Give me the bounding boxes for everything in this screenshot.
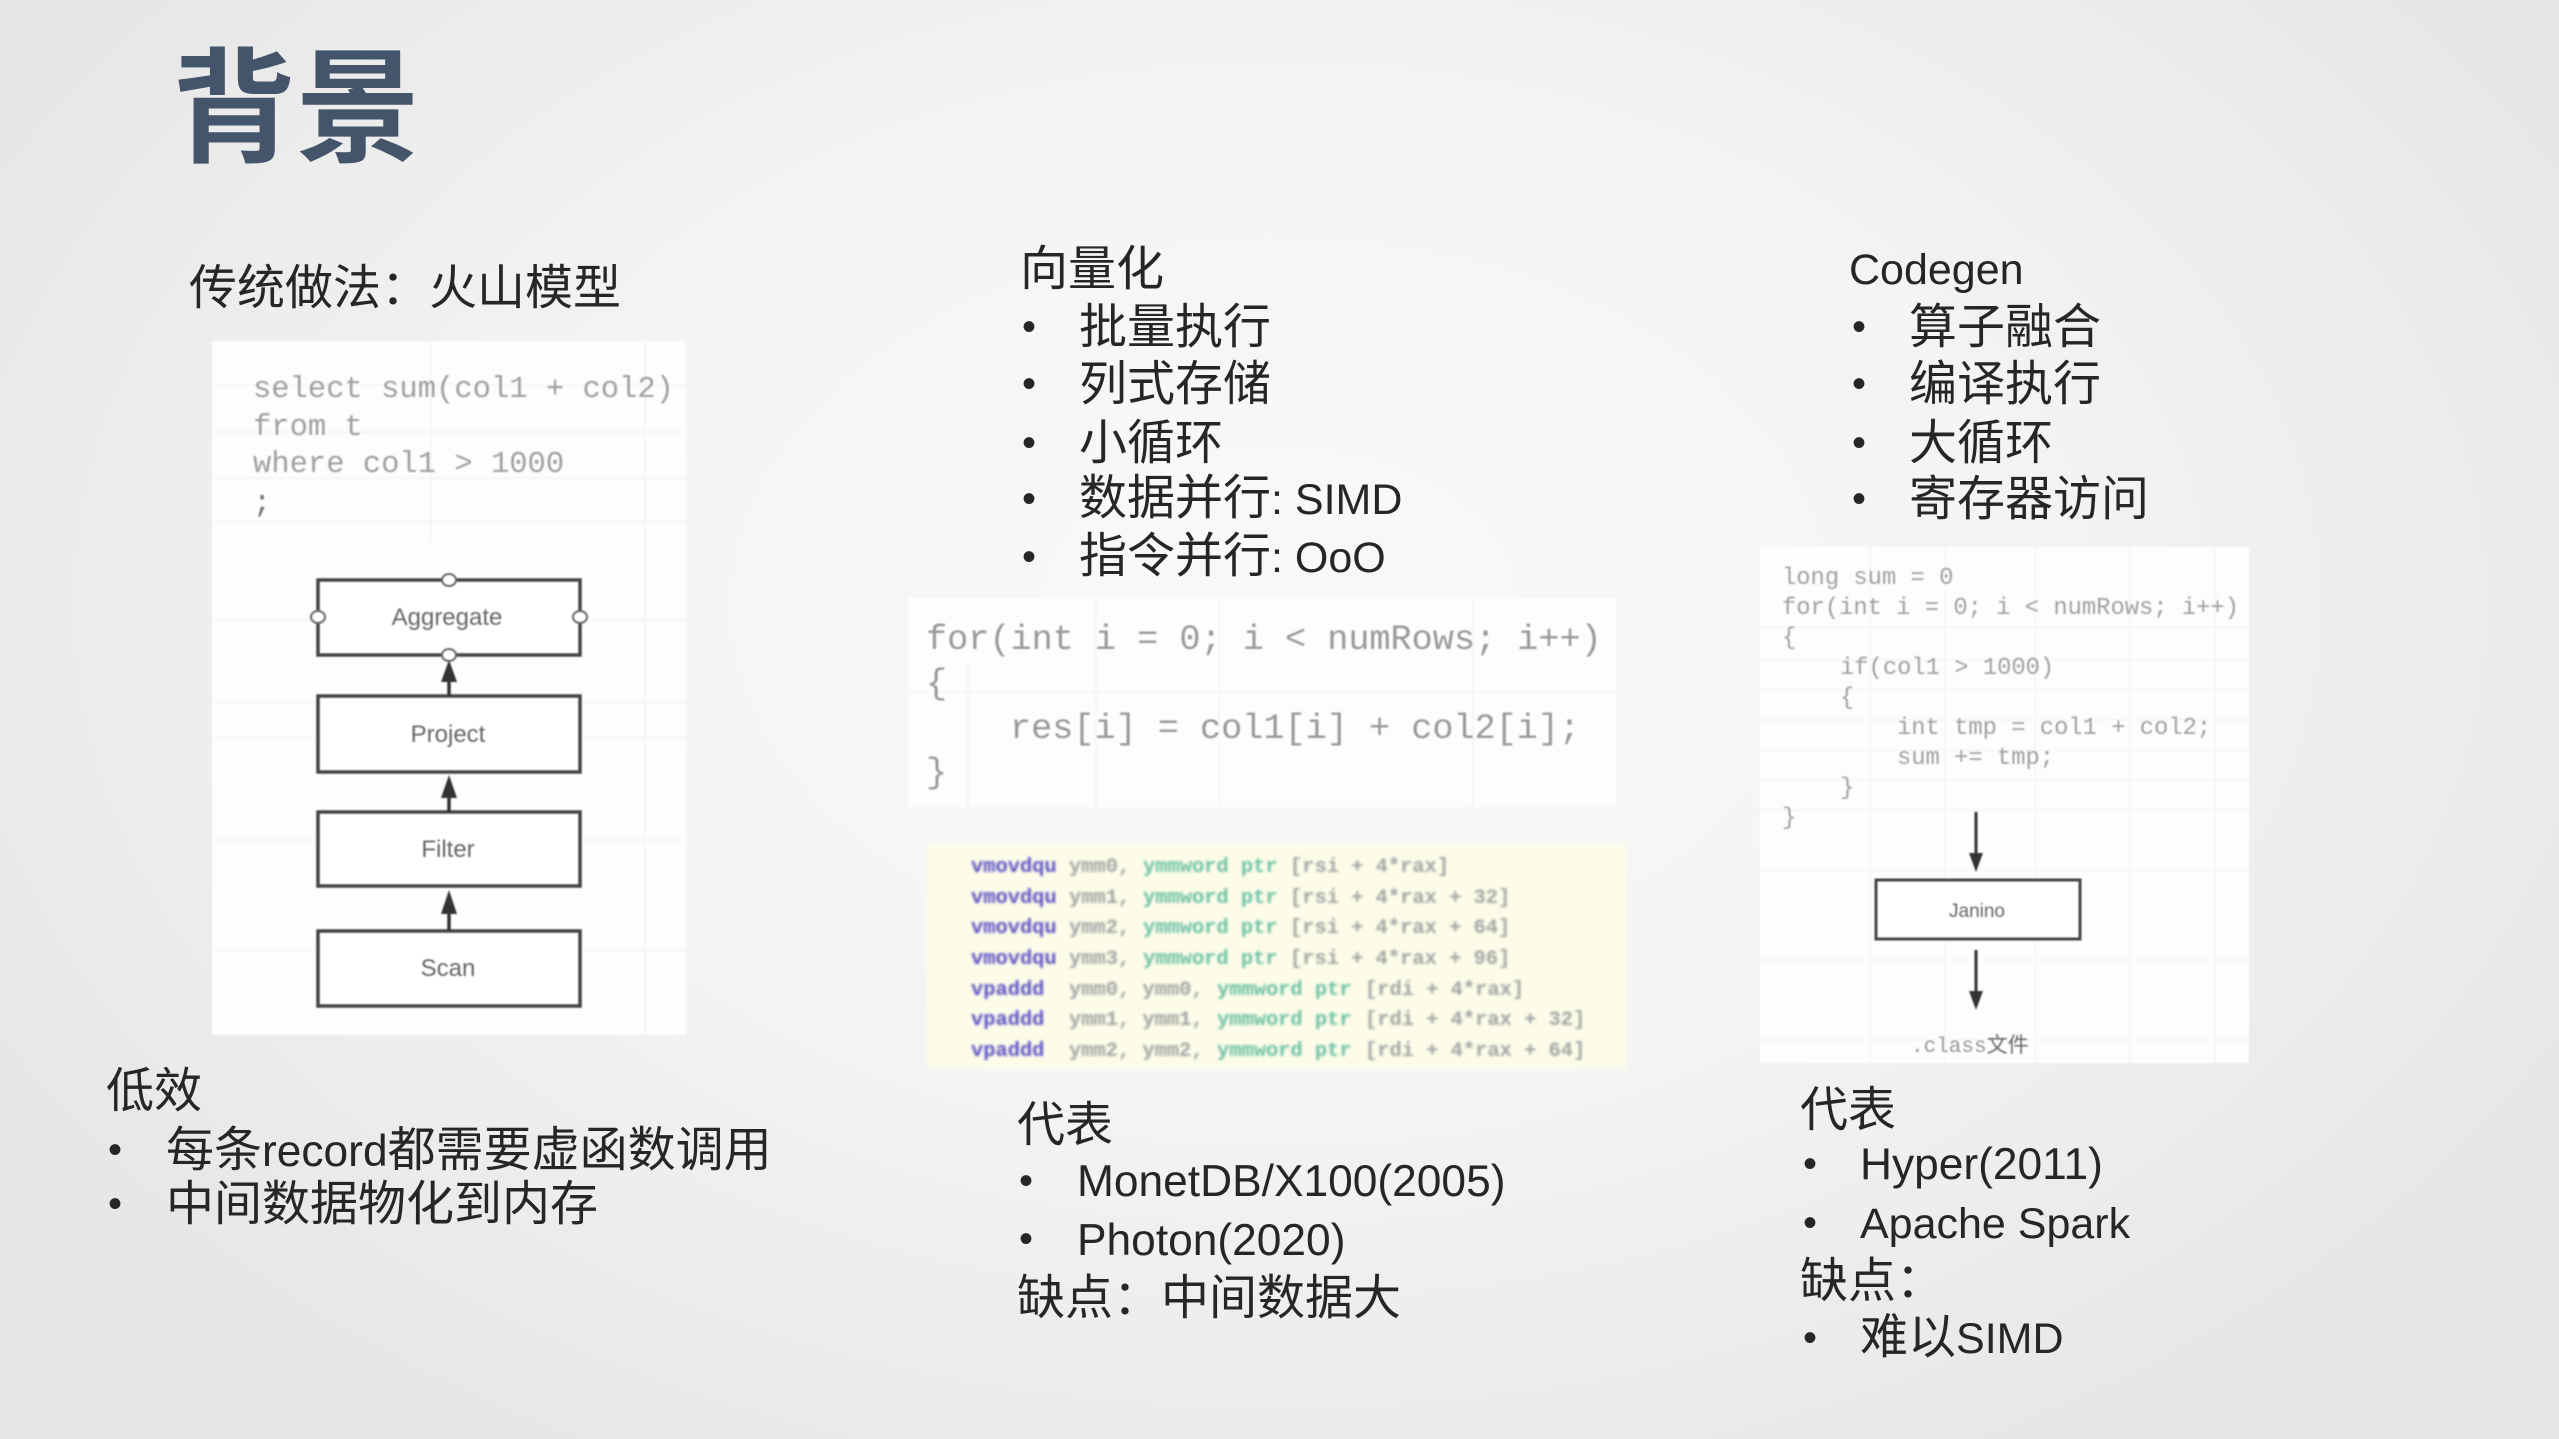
- text block: inefficiency: 每条record都需要虚函数调用: [166, 1124, 772, 1177]
- sql code: where col1 > 1000: [253, 448, 564, 482]
- text block: vectorization representatives and drawback: 缺点：中间数据大: [1017, 1258, 1401, 1328]
- panel: simd assembly code: ymmword ptr: [1217, 1040, 1352, 1063]
- panel: simd assembly code: ymmword ptr: [1143, 948, 1278, 971]
- panel: simd assembly code: [rsi + 4*rax + 64]: [1290, 917, 1510, 940]
- text block: codegen: 算子融合: [1909, 301, 2101, 354]
- arrows: [441, 660, 457, 931]
- heading: volcano model: 传统做法：火山模型: [189, 248, 621, 318]
- text block: vectorization representatives and drawback: 代表: [1017, 1099, 1113, 1152]
- panel: simd assembly code: ymm1,: [1069, 887, 1130, 910]
- text block: vectorization: 指令并行: OoO: [1079, 530, 1386, 583]
- generated code: [1782, 565, 2239, 832]
- text block: vectorization representatives and drawback: MonetDB/X100(2005): [1077, 1157, 1505, 1206]
- panel: simd assembly code: ymm3,: [1069, 948, 1130, 971]
- generated code: if(col1 > 1000): [1840, 655, 2054, 682]
- text block: codegen: 寄存器访问: [1909, 473, 2149, 526]
- text block: codegen representatives and drawback: 代表: [1800, 1084, 1896, 1137]
- text block: codegen representatives and drawback: •: [1803, 1316, 1817, 1360]
- panel: simd assembly code: vpaddd: [971, 979, 1044, 1002]
- text block: vectorization: •: [1022, 362, 1036, 406]
- text block: vectorization: 向量化: [1020, 243, 1164, 296]
- janino box: [1876, 880, 2080, 939]
- text block: inefficiency: [106, 1065, 772, 1231]
- panel: vectorized loop code: }: [926, 753, 947, 793]
- panel: simd assembly code: ymm0,: [1069, 856, 1130, 879]
- arrow into janino: [1969, 812, 1983, 872]
- text block: codegen: 大循环: [1909, 417, 2053, 470]
- panel: simd assembly code: [rsi + 4*rax + 96]: [1290, 948, 1510, 971]
- panel: codegen diagram: [1760, 548, 2249, 1063]
- panel: simd assembly code: ymmword ptr: [1143, 856, 1278, 879]
- panel: simd assembly code: vpaddd: [971, 1040, 1044, 1063]
- text block: codegen representatives and drawback: 难以SIMD: [1860, 1311, 2064, 1364]
- text block: codegen: •: [1852, 477, 1866, 521]
- generated code: {: [1840, 685, 1854, 712]
- text block: codegen representatives and drawback: •: [1803, 1201, 1817, 1245]
- text block: vectorization: 小循环: [1079, 417, 1223, 470]
- text block: vectorization representatives and drawback: Photon(2020): [1077, 1216, 1345, 1265]
- box labels: [392, 604, 502, 982]
- panel: simd assembly code: vmovdqu: [971, 948, 1057, 971]
- generated code: {: [1782, 625, 1796, 652]
- box labels: Filter: [421, 836, 475, 863]
- panel: simd assembly code: [rdi + 4*rax + 32]: [1365, 1009, 1585, 1032]
- panel: vectorized loop code: {: [926, 664, 947, 704]
- text block: codegen: •: [1852, 305, 1866, 349]
- panel: simd assembly code: ymm1, ymm1,: [1069, 1009, 1204, 1032]
- sql code: ;: [253, 487, 271, 521]
- text block: codegen representatives and drawback: Hyper(2011): [1860, 1140, 2103, 1189]
- panel: simd assembly code: [928, 844, 1626, 1068]
- title: 背景: [172, 41, 420, 179]
- panel: simd assembly code: ymmword ptr: [1143, 887, 1278, 910]
- text block: vectorization: •: [1022, 477, 1036, 521]
- sql code: [253, 373, 674, 521]
- text block: vectorization: 批量执行: [1079, 301, 1271, 354]
- text block: vectorization representatives and drawback: •: [1019, 1159, 1033, 1203]
- text block: vectorization: •: [1022, 421, 1036, 465]
- panel: simd assembly code: vmovdqu: [971, 856, 1057, 879]
- panel: simd assembly code: ymm2,: [1069, 917, 1130, 940]
- panel: simd assembly code: [rsi + 4*rax]: [1290, 856, 1449, 879]
- panel: simd assembly code: ymm0, ymm0,: [1069, 979, 1204, 1002]
- text block: codegen: •: [1852, 421, 1866, 465]
- panel: simd assembly code: vmovdqu: [971, 887, 1057, 910]
- generated code: sum += tmp;: [1897, 745, 2054, 772]
- text block: codegen: [1849, 246, 2149, 526]
- panel: simd assembly code: vmovdqu: [971, 917, 1057, 940]
- text block: vectorization: 数据并行: SIMD: [1079, 472, 1402, 525]
- connection handles: [311, 574, 587, 661]
- generated code: }: [1840, 775, 1854, 802]
- text block: inefficiency: •: [108, 1128, 122, 1172]
- panel: volcano model diagram: [212, 341, 686, 1035]
- panel: codegen diagram: Janino: [1949, 901, 2005, 922]
- text block: inefficiency: •: [108, 1182, 122, 1226]
- flow boxes: [318, 580, 580, 1006]
- text block: vectorization: •: [1022, 535, 1036, 579]
- text block: codegen representatives and drawback: Apache Spark: [1860, 1200, 2130, 1248]
- arrow out of janino: [1969, 950, 1983, 1010]
- panel: vectorized loop code: for(int i = 0; i < numRows; i++): [926, 620, 1602, 660]
- text block: vectorization representatives and drawback: [1017, 1099, 1505, 1328]
- text block: codegen: Codegen: [1849, 246, 2024, 294]
- panel: simd assembly code: [rsi + 4*rax + 32]: [1290, 887, 1510, 910]
- text block: inefficiency: 中间数据物化到内存: [166, 1178, 598, 1231]
- panel: simd assembly code: ymmword ptr: [1217, 1009, 1352, 1032]
- panel: vectorized loop code: res[i] = col1[i] + col2[i];: [1010, 709, 1580, 749]
- panel: simd assembly code: ymm2, ymm2,: [1069, 1040, 1204, 1063]
- sql code: select sum(col1 + col2): [253, 373, 674, 407]
- text block: vectorization: •: [1022, 305, 1036, 349]
- box labels: Project: [411, 721, 486, 748]
- panel: vectorized loop code: [926, 620, 1602, 793]
- panel: simd assembly code: ymmword ptr: [1217, 979, 1352, 1002]
- generated code: long sum = 0: [1782, 565, 1953, 592]
- text block: inefficiency: 低效: [106, 1065, 202, 1118]
- text block: codegen representatives and drawback: 缺点：: [1800, 1241, 1944, 1311]
- generated code: for(int i = 0; i < numRows; i++): [1782, 595, 2239, 622]
- text block: vectorization: 列式存储: [1079, 358, 1271, 411]
- panel: simd assembly code: vpaddd: [971, 1009, 1044, 1032]
- panel: simd assembly code: [rdi + 4*rax]: [1365, 979, 1524, 1002]
- class file label: .class文件: [1911, 1029, 2029, 1059]
- text block: vectorization: [1020, 243, 1402, 583]
- text block: codegen representatives and drawback: [1800, 1084, 2130, 1364]
- box labels: Scan: [421, 955, 475, 982]
- panel: simd assembly code: ymmword ptr: [1143, 917, 1278, 940]
- box labels: Aggregate: [392, 604, 502, 631]
- text block: vectorization representatives and drawback: •: [1019, 1217, 1033, 1261]
- text block: codegen representatives and drawback: •: [1803, 1142, 1817, 1186]
- generated code: }: [1782, 805, 1796, 832]
- generated code: int tmp = col1 + col2;: [1897, 715, 2211, 742]
- panel: simd assembly code: [rdi + 4*rax + 64]: [1365, 1040, 1585, 1063]
- text block: codegen: •: [1852, 362, 1866, 406]
- text block: codegen: 编译执行: [1909, 358, 2101, 411]
- sql code: from t: [253, 411, 363, 445]
